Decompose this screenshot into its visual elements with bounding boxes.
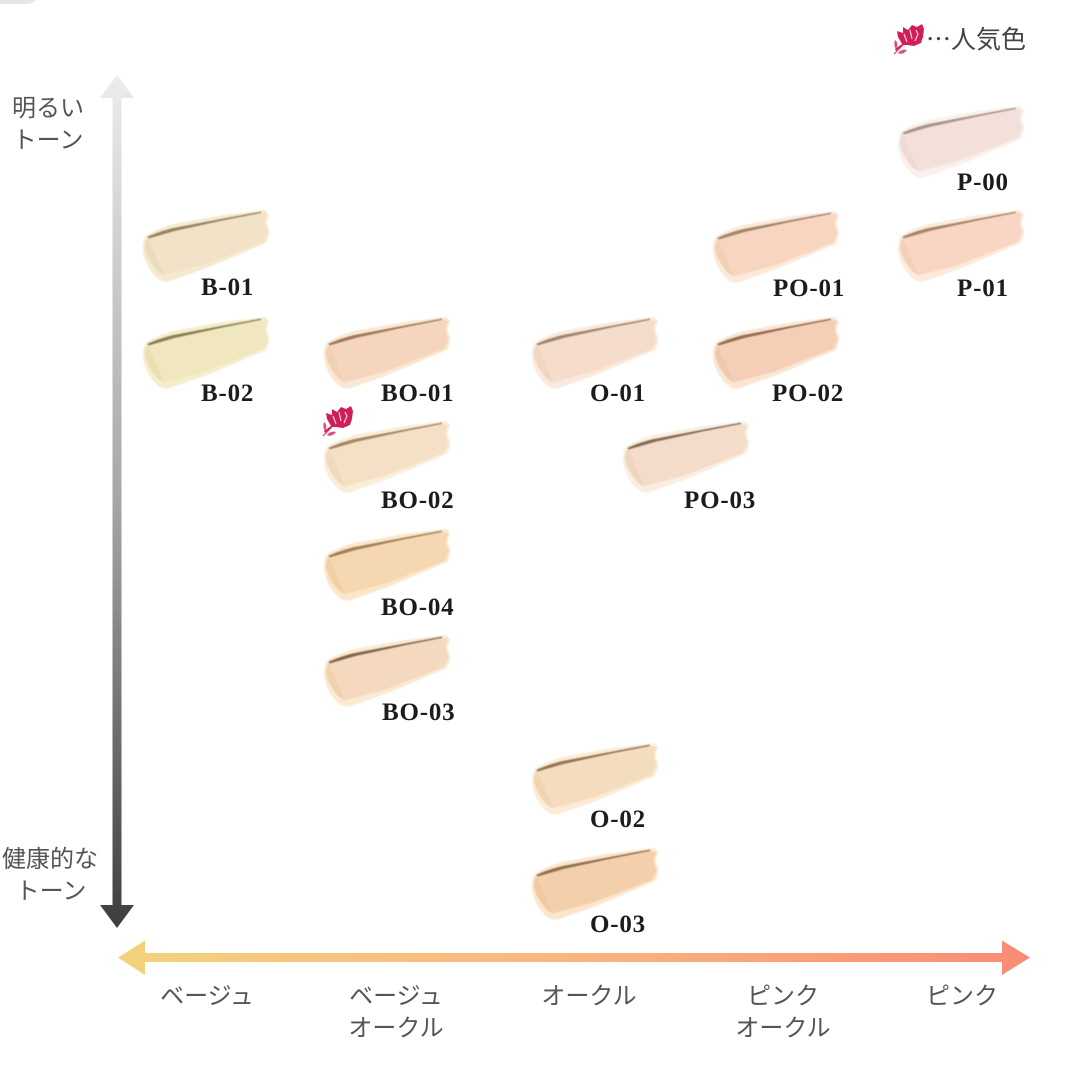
swatch BO-03 xyxy=(324,635,455,726)
swatch O-02: O-02 xyxy=(590,806,646,833)
axis label: pink ochre: オークル xyxy=(735,1015,831,1042)
axis label: bright tone: トーン xyxy=(13,127,83,154)
swatch B-01: B-01 xyxy=(201,274,254,301)
axis label: bright tone xyxy=(12,95,84,154)
swatch PO-02: PO-02 xyxy=(772,380,844,407)
swatch BO-02 xyxy=(324,421,454,514)
axis label: beige: ベージュ xyxy=(160,983,254,1010)
swatch P-00: P-00 xyxy=(957,169,1009,196)
axis label: beige ochre xyxy=(348,983,444,1042)
axis label: bright tone: 明るい xyxy=(12,95,84,122)
icon: rose on BO-02 xyxy=(323,406,353,436)
swatch BO-02: BO-02 xyxy=(381,487,454,514)
swatch O-01 xyxy=(532,317,658,407)
swatch B-02 xyxy=(143,317,269,407)
axis label: healthy tone xyxy=(2,846,98,905)
swatch BO-04 xyxy=(324,529,454,621)
axis label: healthy tone: 健康的な xyxy=(2,846,98,873)
swatch BO-01: BO-01 xyxy=(381,380,454,407)
vertical axis arrow: tone xyxy=(100,75,134,928)
swatch O-01: O-01 xyxy=(590,380,646,407)
swatch BO-04: BO-04 xyxy=(381,594,454,621)
swatch PO-02 xyxy=(713,317,844,407)
swatch BO-03: BO-03 xyxy=(382,699,455,726)
swatch BO-01 xyxy=(324,317,454,407)
axis label: pink: ピンク xyxy=(926,983,998,1010)
legend: popular colour xyxy=(894,24,1026,54)
swatch P-00 xyxy=(898,106,1024,196)
swatch P-01 xyxy=(898,210,1024,302)
axis label: beige ochre: オークル xyxy=(348,1015,444,1042)
swatch PO-01: PO-01 xyxy=(773,275,845,302)
axis label: pink ochre xyxy=(735,983,831,1042)
swatch B-02: B-02 xyxy=(201,380,254,407)
swatch B-01 xyxy=(143,210,269,301)
axis label: pink ochre: ピンク xyxy=(747,983,819,1010)
axis label: ochre: オークル xyxy=(541,983,637,1010)
swatch PO-03: PO-03 xyxy=(684,487,756,514)
swatch O-03: O-03 xyxy=(590,911,646,938)
swatch O-03 xyxy=(532,848,658,938)
swatch O-02 xyxy=(532,743,658,833)
axis label: healthy tone: トーン xyxy=(16,878,86,905)
icon: rose legend xyxy=(894,24,924,54)
swatch P-01: P-01 xyxy=(957,275,1009,302)
axis label: beige ochre: ベージュ xyxy=(349,983,443,1010)
legend text: ⋯人気色 xyxy=(926,26,1026,54)
swatch PO-03 xyxy=(623,421,756,514)
top-left corner mark xyxy=(0,0,36,4)
horizontal axis arrow: hue xyxy=(118,940,1030,975)
swatch PO-01 xyxy=(713,211,845,302)
